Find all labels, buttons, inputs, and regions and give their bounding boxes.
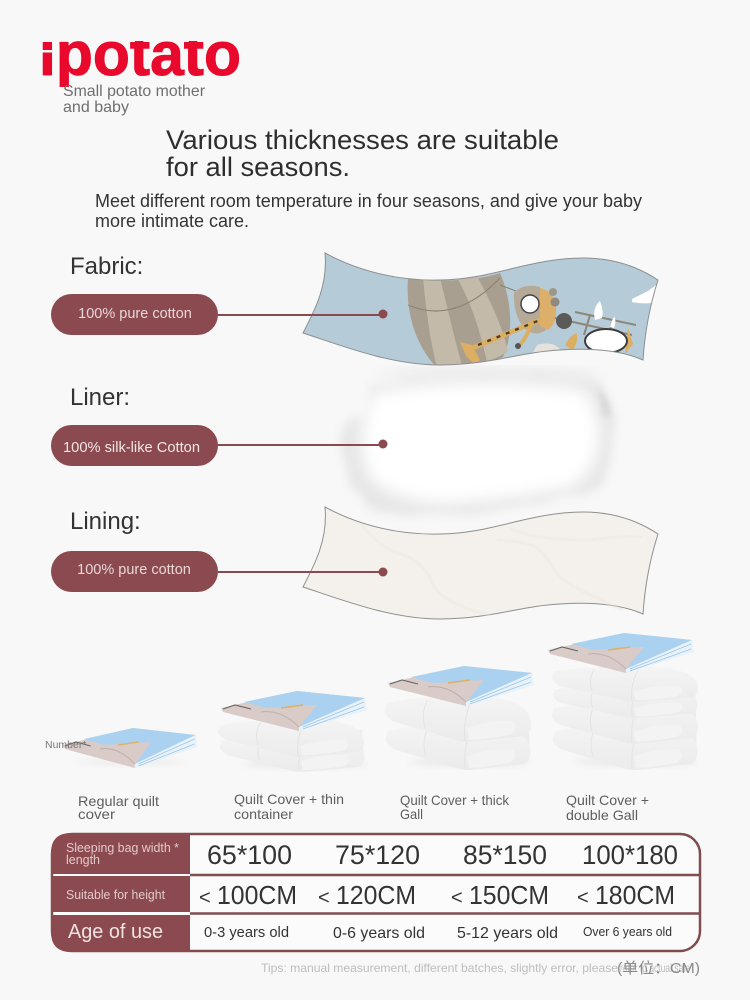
liner label pill: 100% silk-like Cotton xyxy=(63,440,200,456)
caption: container xyxy=(234,806,293,822)
row values: height: 150CM xyxy=(469,880,549,910)
row values: age: 0-6 years old xyxy=(333,925,425,942)
row header: suitable height: Suitable for height xyxy=(66,888,166,902)
row values: size: 100*180 xyxy=(582,840,678,870)
subtitle: Meet different room temperature in four seasons, and give your baby xyxy=(95,191,642,211)
product: quilt cover + thick gall xyxy=(385,666,534,822)
liner leader line xyxy=(218,440,388,448)
caption: Quilt Cover + thin xyxy=(234,791,344,807)
product: regular quilt cover xyxy=(45,728,197,822)
fabric label pill: 100% pure cotton xyxy=(78,306,192,322)
row header: age of use: Age of use xyxy=(68,921,163,943)
row values: height: 100CM xyxy=(217,880,297,910)
liner label pill xyxy=(51,425,218,466)
row values: height: 180CM xyxy=(595,880,675,910)
brand name: Small potato mother xyxy=(63,83,206,100)
cover illustration xyxy=(63,728,197,768)
caption: cover xyxy=(78,806,115,822)
fabric leader line xyxy=(218,310,388,318)
lining quilted swatch xyxy=(303,507,658,619)
row header: suitable height xyxy=(51,876,190,912)
size table xyxy=(51,833,700,952)
stacked quilt illustration xyxy=(548,633,698,770)
fabric shadow xyxy=(380,371,600,383)
table frame xyxy=(52,834,700,951)
row header: sleeping bag size xyxy=(51,833,190,874)
row values: age: 0-3 years old xyxy=(204,925,289,941)
caption: Quilt Cover + thick xyxy=(400,792,510,808)
row values: age: Over 6 years old xyxy=(583,925,672,939)
footnote tips: Tips: manual measurement, different batches, slightly error, please xyxy=(261,961,618,975)
row values: size: 85*150 xyxy=(463,840,547,870)
logo: ipotato: ipotato xyxy=(39,20,241,88)
row header: sleeping bag size: Sleeping bag width * xyxy=(66,841,179,855)
row values: height xyxy=(199,880,675,910)
row values: height: < xyxy=(451,887,463,909)
row values: size xyxy=(207,840,678,870)
fabric label pill xyxy=(51,294,218,335)
fabric swatch with balloon print xyxy=(303,253,660,369)
row values: age: 5-12 years old xyxy=(457,925,558,942)
brand name: and baby xyxy=(63,99,129,116)
lining label pill: 100% pure cotton xyxy=(77,562,191,578)
row values: height: 120CM xyxy=(336,880,416,910)
lining label pill xyxy=(51,551,218,592)
footnote tips: refer to actual sale xyxy=(620,961,690,975)
row values: size: 65*100 xyxy=(207,840,292,870)
number note: Number* xyxy=(45,739,86,751)
subtitle: more intimate care. xyxy=(95,211,249,231)
row values: height: < xyxy=(318,887,330,909)
title: Various thicknesses are suitable xyxy=(166,125,559,155)
row header: age of use xyxy=(51,915,190,952)
caption: double Gall xyxy=(566,807,638,823)
row header: sleeping bag size: length xyxy=(66,853,100,867)
liner cotton wadding xyxy=(342,377,613,514)
panel: lining xyxy=(51,507,658,619)
row values: age xyxy=(204,925,672,942)
row values: height: < xyxy=(199,887,211,909)
product: quilt cover + thin container xyxy=(218,691,367,822)
stacked quilt illustration xyxy=(218,691,367,772)
title: for all seasons. xyxy=(166,152,350,182)
unit note: (单位：CM) xyxy=(617,960,700,977)
fabric heading: Fabric: xyxy=(70,253,143,280)
row values: height: < xyxy=(577,887,589,909)
row values: size: 75*120 xyxy=(335,840,420,870)
product: quilt cover + double gall xyxy=(548,633,698,823)
panel: liner xyxy=(51,377,613,514)
row divider xyxy=(190,875,700,914)
panel: fabric xyxy=(51,253,660,383)
liner heading: Liner: xyxy=(70,384,130,411)
caption: Gall xyxy=(400,806,423,822)
caption: Regular quilt xyxy=(78,793,159,809)
lining leader line xyxy=(218,568,388,576)
caption: Quilt Cover + xyxy=(566,792,649,808)
stacked quilt illustration xyxy=(385,666,534,770)
lining heading: Lining: xyxy=(70,508,141,535)
